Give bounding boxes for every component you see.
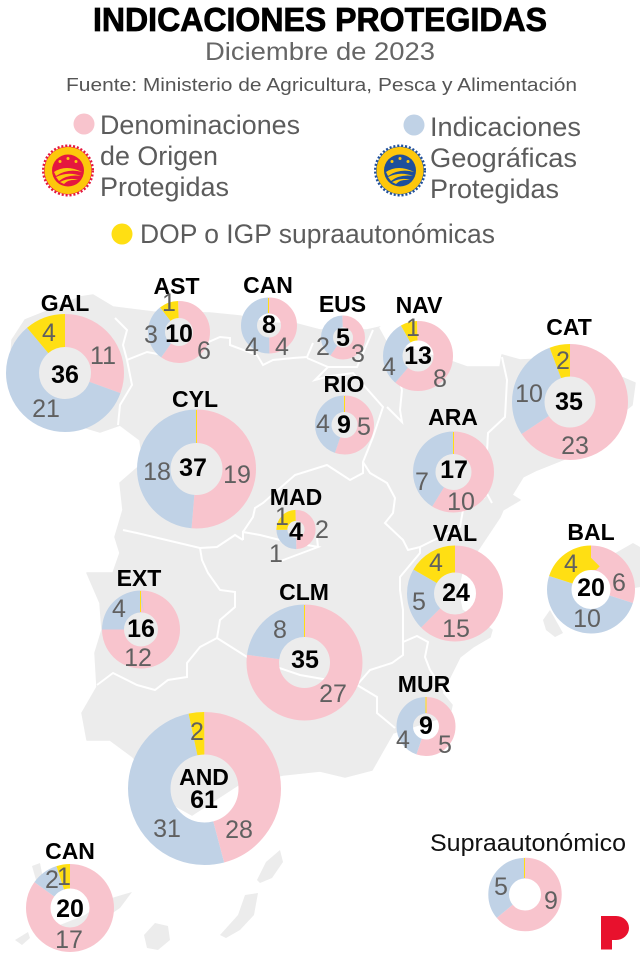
- donut: NAV: 13: [404, 342, 432, 370]
- donut: MAD: 4: [289, 518, 303, 546]
- donut: EXT: 4: [112, 595, 126, 623]
- donut: ARA: ARA: [428, 404, 478, 430]
- donut: ARA: 17: [440, 456, 468, 484]
- donut: CYL: 19: [223, 461, 251, 489]
- donut: GAL: 21: [32, 395, 60, 423]
- donut: AND: 2: [190, 718, 204, 746]
- donut: CAT: 10: [515, 380, 543, 408]
- donut: CYL: [143, 386, 251, 512]
- donut: CAN south: 2: [45, 866, 59, 894]
- donut: EUS: 2: [316, 333, 330, 361]
- donut: VAL: 5: [412, 588, 426, 616]
- donut: GAL: 36: [51, 361, 79, 389]
- source line: Fuente: Ministerio de Agricultura, Pesca y Alimentación: [66, 75, 577, 95]
- donut: GAL: GAL: [41, 290, 89, 316]
- donut: RIO: 5: [357, 413, 371, 441]
- legend: denominaciones de origen protegidas: Denominaciones: [100, 110, 300, 140]
- donut: EXT: 16: [127, 615, 155, 643]
- donut: CYL: 18: [143, 458, 171, 486]
- donut: AND: 31: [153, 815, 181, 843]
- donut: CYL: CYL: [172, 386, 218, 412]
- donut: BAL: BAL: [567, 519, 615, 545]
- donut: GAL: [22, 290, 116, 423]
- donut: MUR: [396, 671, 452, 759]
- donut: ARA: [415, 404, 483, 516]
- donut: AST: AST: [154, 273, 200, 299]
- donut: BAL: 10: [573, 605, 601, 633]
- donut: CAT: 23: [561, 432, 589, 460]
- legend: indicaciones geograficas protegidas: Geográficas: [430, 143, 577, 173]
- donut: RIO: 4: [316, 410, 330, 438]
- donut: CAT: CAT: [546, 314, 592, 340]
- donut: ARA: 7: [415, 468, 429, 496]
- donut: RIO: [316, 371, 371, 446]
- icon: DOP seal: [44, 146, 92, 194]
- background map of Spain: [10, 295, 640, 950]
- donut: CAN north: 4: [245, 333, 259, 361]
- donut: RIO: RIO: [324, 371, 364, 397]
- donut: RIO: 9: [337, 411, 351, 439]
- donut: VAL: 24: [442, 579, 470, 607]
- donut: AND: 61: [190, 786, 218, 814]
- donut: EUS: EUS: [319, 291, 366, 317]
- donut: CLM: 27: [319, 680, 347, 708]
- donut: MAD: MAD: [270, 484, 322, 510]
- legend: indicaciones geograficas protegidas: [404, 112, 581, 204]
- donut: EUS: [316, 291, 366, 368]
- donut: CAN north: 4: [275, 333, 289, 361]
- legend: supraautonomicas: DOP o IGP supraautonómicas: [140, 219, 495, 249]
- donut: NAV: 8: [433, 365, 447, 393]
- donut: CLM: 35: [291, 646, 319, 674]
- donut: CAN north: 8: [262, 311, 276, 339]
- donut: AST: 10: [165, 320, 193, 348]
- donut: CAN north: [243, 272, 293, 361]
- donut: AND: AND: [179, 764, 229, 790]
- donut: EUS: 3: [351, 340, 365, 368]
- donut: CAT: 2: [556, 347, 570, 375]
- donut: supraautonomico: Supraautonómico: [430, 830, 626, 857]
- legend: denominaciones de origen protegidas: [74, 110, 300, 202]
- donut: AST: [144, 273, 211, 365]
- donut: CLM: 8: [273, 616, 287, 644]
- legend: indicaciones geograficas protegidas: Protegidas: [430, 174, 559, 204]
- donut: VAL: [412, 520, 490, 643]
- donut: AST: 1: [162, 289, 176, 317]
- donut: MUR: 5: [438, 731, 452, 759]
- donut: EXT: 12: [124, 644, 152, 672]
- donut: BAL: 20: [577, 574, 605, 602]
- donut: CAN south: CAN: [45, 838, 95, 864]
- donut: EXT: EXT: [117, 565, 161, 591]
- donut: supraautonomico: 5: [494, 873, 508, 901]
- donut: MUR: 9: [419, 712, 433, 740]
- date subtitle: Diciembre de 2023: [205, 38, 435, 66]
- donut: BAL: [559, 519, 626, 633]
- donut: CAN south: 17: [55, 926, 83, 954]
- icon: IGP seal: [376, 146, 424, 194]
- logo: [601, 916, 629, 950]
- donut: CAT: 35: [555, 388, 583, 416]
- donut: BAL: 6: [612, 569, 626, 597]
- donut: supraautonomico: 9: [544, 887, 558, 915]
- donut: supraautonomico: [430, 830, 626, 921]
- donut: AND: 28: [225, 816, 253, 844]
- donut: CAT: [515, 314, 612, 460]
- donut: VAL: 15: [442, 615, 470, 643]
- legend: denominaciones de origen protegidas: de Origen: [100, 141, 218, 171]
- donut: NAV: 1: [406, 314, 420, 342]
- donut: EXT: [112, 565, 169, 672]
- donut: CYL: 37: [179, 454, 207, 482]
- donut: AST: 3: [144, 321, 158, 349]
- donut: VAL: 4: [429, 549, 443, 577]
- donut: AST: 6: [197, 337, 211, 365]
- donut: BAL: 4: [564, 550, 578, 578]
- donut: GAL: 4: [42, 319, 56, 347]
- title: INDICACIONES PROTEGIDAS: [93, 1, 547, 38]
- donut: GAL: 11: [90, 342, 116, 370]
- donut: NAV: 4: [382, 353, 396, 381]
- donut: CAN south: 20: [56, 895, 84, 923]
- donut: MAD: 1: [269, 540, 283, 568]
- donut: VAL: VAL: [433, 520, 477, 546]
- donut: NAV: NAV: [396, 292, 443, 318]
- donut: NAV: [382, 292, 447, 393]
- donut: MUR: MUR: [398, 671, 451, 697]
- donut: CAN north: CAN: [243, 272, 293, 298]
- donut: MAD: [269, 484, 329, 568]
- donut: AND: [149, 718, 260, 844]
- donut: CAN south: 1: [57, 863, 71, 891]
- donut: CAN south: [38, 838, 102, 954]
- legend: indicaciones geograficas protegidas: Indicaciones: [430, 112, 581, 142]
- donut: MUR: 4: [396, 726, 410, 754]
- donut: ARA: 10: [447, 488, 475, 516]
- donut: CLM: CLM: [279, 579, 329, 605]
- donut: MAD: 1: [275, 503, 289, 531]
- legend: denominaciones de origen protegidas: Protegidas: [100, 172, 229, 202]
- donut: CLM: [263, 579, 347, 708]
- donut: EUS: 5: [336, 324, 350, 352]
- donut: MAD: 2: [315, 516, 329, 544]
